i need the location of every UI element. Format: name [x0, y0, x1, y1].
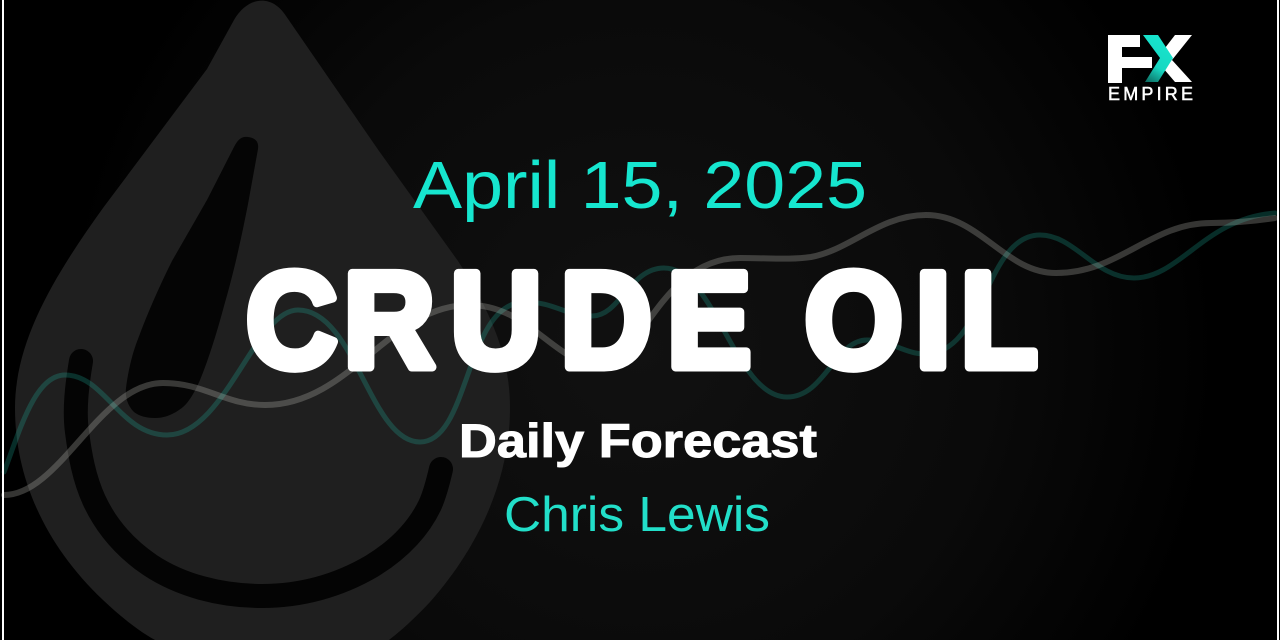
date: April 15, 2025	[413, 148, 867, 223]
logo letter X	[1163, 35, 1192, 82]
subtitle: Daily Forecast	[459, 414, 817, 467]
logo: FX Empire	[1108, 35, 1193, 104]
logo letter F	[1108, 35, 1152, 83]
icon: oil drop watermark	[15, 1, 510, 640]
chart line: teal wave	[4, 213, 1275, 472]
chart line: gray wave	[4, 215, 1275, 495]
drop highlight: blade	[126, 137, 258, 418]
logo chevron	[1143, 35, 1173, 82]
drop highlight: lower arc	[76, 361, 441, 596]
title: CRUDE OIL	[246, 244, 1038, 396]
logo wordmark: EMPIRE	[1108, 84, 1193, 104]
author: Chris Lewis	[504, 488, 770, 542]
